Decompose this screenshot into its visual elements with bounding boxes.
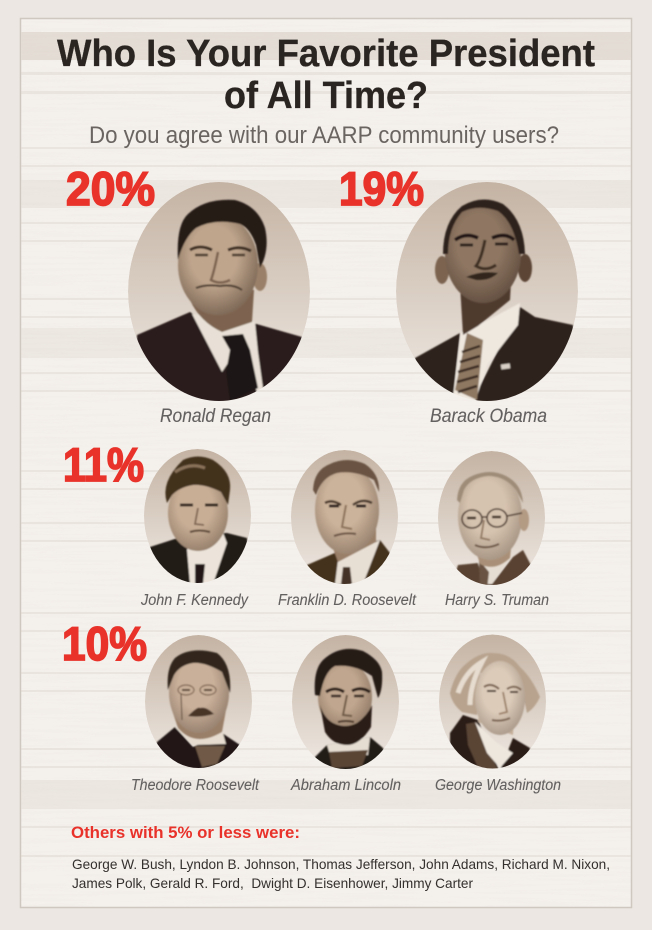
- name: Harry S. Truman: Harry S. Truman: [445, 592, 549, 609]
- portrait: Barack Obama: [396, 182, 578, 410]
- percentage: 20%: 20%: [66, 162, 155, 215]
- subtitle: Do you agree with our AARP community users?: [89, 122, 559, 149]
- title: of All Time?: [224, 75, 428, 117]
- portrait: Franklin D. Roosevelt: [291, 450, 398, 590]
- portrait: Abraham Lincoln: [292, 635, 399, 775]
- title: Who Is Your Favorite President: [57, 33, 595, 75]
- name: Theodore Roosevelt: Theodore Roosevelt: [131, 777, 260, 794]
- name: George Washington: George Washington: [435, 777, 561, 794]
- name: Abraham Lincoln: Abraham Lincoln: [290, 777, 401, 794]
- portrait: Harry S. Truman: [438, 451, 545, 590]
- portrait: George Washington: [439, 634, 546, 775]
- name: John F. Kennedy: John F. Kennedy: [140, 592, 249, 609]
- others heading: Others with 5% or less were:: [71, 824, 300, 842]
- portrait: Ronald Reagan: [128, 182, 310, 410]
- title: [57, 33, 595, 117]
- others list: [72, 856, 610, 891]
- portrait: Theodore Roosevelt: [145, 635, 252, 775]
- name: Ronald Regan: Ronald Regan: [160, 406, 271, 427]
- percentage: 19%: 19%: [339, 162, 424, 215]
- others list: James Polk, Gerald R. Ford, Dwight D. Eisenhower, Jimmy Carter: [72, 875, 473, 891]
- percentage: 11%: 11%: [63, 438, 144, 491]
- others list: George W. Bush, Lyndon B. Johnson, Thomas Jefferson, John Adams, Richard M. Nixon,: [72, 856, 610, 872]
- percentage: 10%: 10%: [62, 617, 147, 670]
- name: Franklin D. Roosevelt: Franklin D. Roosevelt: [278, 592, 417, 609]
- name: Barack Obama: Barack Obama: [430, 406, 547, 427]
- portrait: John F. Kennedy: [144, 449, 252, 590]
